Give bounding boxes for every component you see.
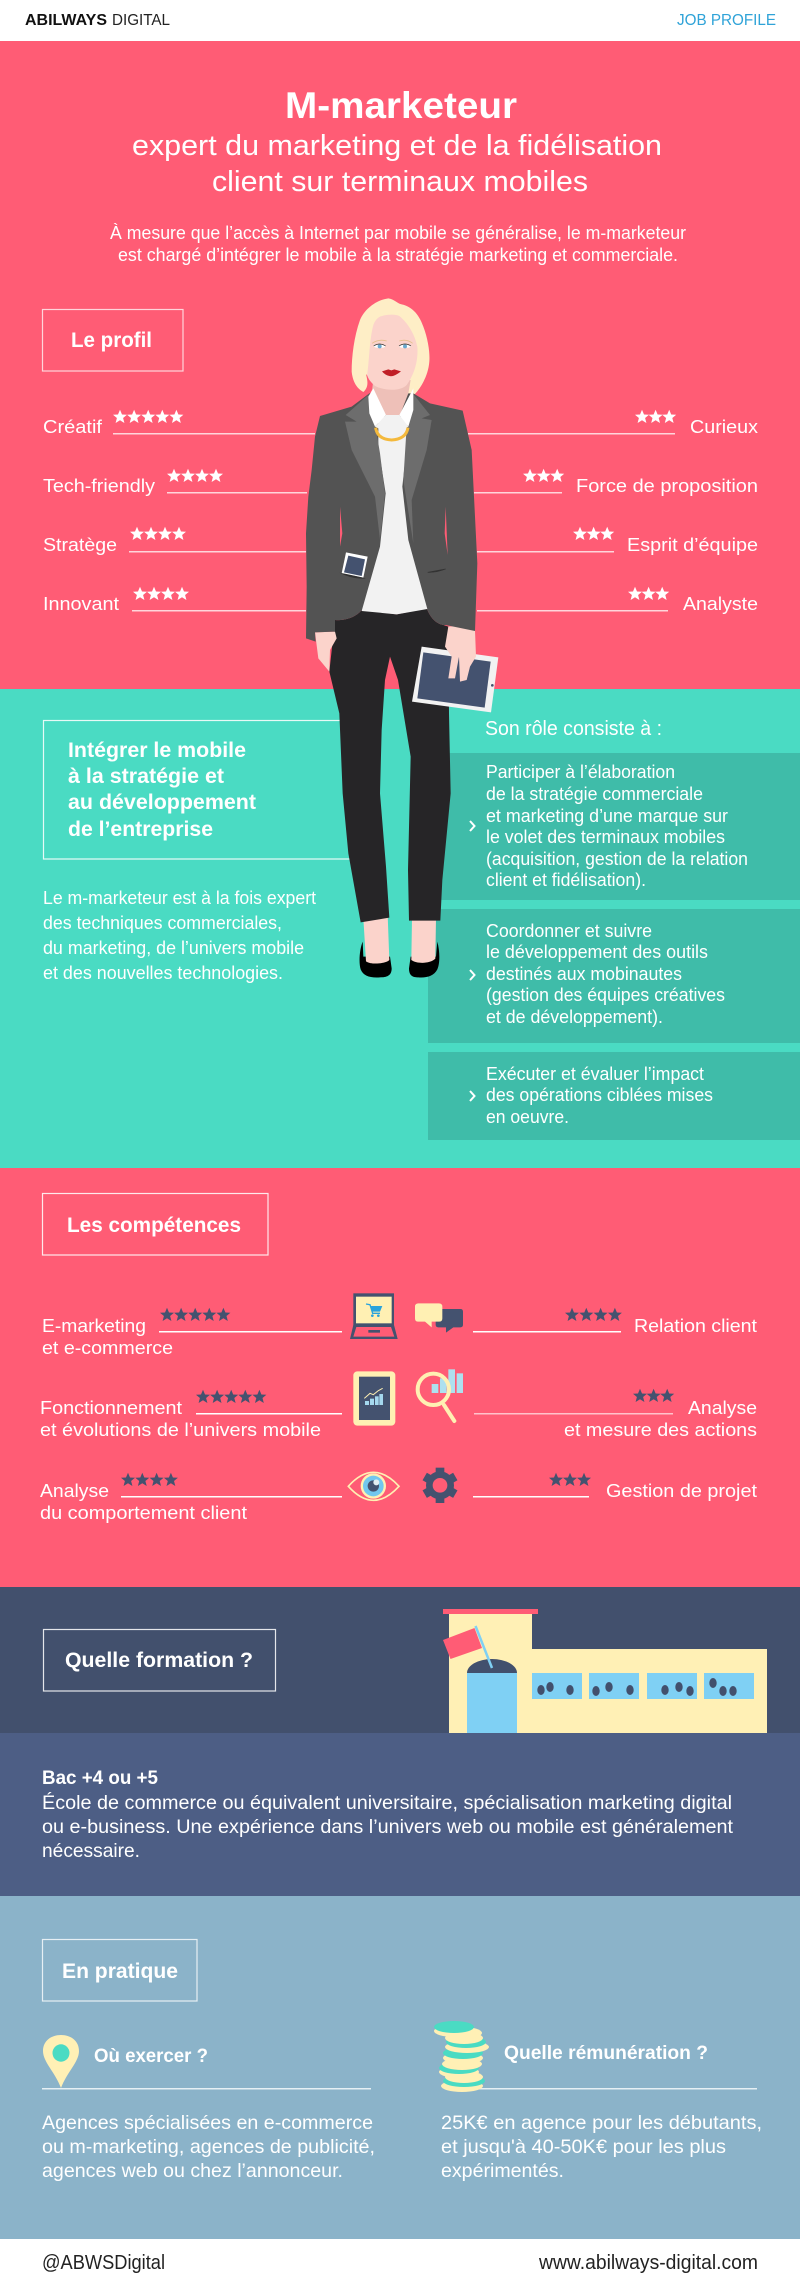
skill: Analyse et mesure: et mesure des actions [564, 1419, 757, 1440]
column: où exercer: ou m-marketing, agences de publicité, [42, 2136, 375, 2158]
trait: Esprit d'équipe [477, 527, 758, 555]
text: description [43, 887, 316, 983]
eyes [372, 340, 413, 348]
skill: Analyse du comportement: du comportement client [40, 1502, 247, 1523]
heading: le profil: Le profil [71, 328, 152, 352]
heading: quelle formation [44, 1630, 276, 1691]
text: description: des techniques commerciales, [43, 912, 282, 933]
skill: Analyse et mesure: Analyse [688, 1397, 757, 1418]
people in windows [537, 1678, 737, 1696]
role text 2: destinés aux mobinautes [486, 963, 682, 984]
trait: Créatif [43, 410, 315, 437]
skill: Analyse du comportement [40, 1473, 342, 1523]
trait: Curieux [468, 410, 759, 437]
lower legs [363, 915, 436, 964]
logo: DIGITAL [112, 12, 170, 29]
trait: Créatif: Créatif [43, 416, 103, 437]
heading: en pratique: En pratique [62, 1959, 178, 1983]
icon: speech bubbles [415, 1303, 463, 1333]
logo [25, 12, 170, 29]
neck [372, 380, 411, 417]
chevron [470, 970, 474, 980]
skill: Analyse du comportement: Analyse [40, 1480, 109, 1501]
door [467, 1673, 517, 1733]
hair back [352, 298, 429, 394]
trait: Innovant: Innovant [43, 593, 119, 614]
role text 3: Exécuter et évaluer l’impact [486, 1063, 704, 1084]
role text 3: en oeuvre. [486, 1106, 569, 1127]
heading: intégrer le mobile: de l’entreprise [68, 817, 213, 841]
intro text: est chargé d’intégrer le mobile à la stratégie marketing et commerciale. [118, 244, 678, 265]
role card 1 [428, 753, 800, 900]
panel: formation header [0, 1587, 800, 1733]
trait: Analyste [477, 587, 758, 614]
skill: E-marketing [42, 1308, 342, 1358]
text: description: et des nouvelles technologies. [43, 962, 283, 983]
heading: son rôle: Son rôle consiste à : [485, 717, 662, 740]
role text 2 [470, 920, 725, 1027]
role text 1: client et fidélisation). [486, 869, 646, 890]
left lapel [345, 394, 385, 540]
profile traits: right [468, 410, 759, 614]
role text 3: des opérations ciblées mises [486, 1084, 713, 1105]
role text 2: Coordonner et suivre [486, 920, 652, 941]
icon: tablet chart [353, 1371, 395, 1426]
heading: les compétences [42, 1194, 268, 1255]
text: description: Le m-marketeur est à la fois expert [43, 887, 316, 908]
column: où exercer: Agences spécialisées en e-commerce [42, 2112, 373, 2134]
role text 1: Participer à l’élaboration [486, 761, 675, 782]
heading: intégrer le mobile: à la stratégie et [68, 764, 224, 788]
column: où exercer: agences web ou chez l’annonceur. [42, 2160, 343, 2182]
panel: formation text: Bac +4 ou +5 [42, 1767, 158, 1789]
heading: intégrer le mobile: au développement [68, 790, 256, 814]
panel: formation text [0, 1733, 800, 1896]
profile traits: left [43, 410, 315, 614]
column: quelle rémunération: et jusqu'à 40-50K€ pour les plus [441, 2136, 726, 2158]
right hand [445, 625, 476, 682]
trait: Tech-friendly: Tech-friendly [43, 475, 156, 496]
icon: laptop with cart [350, 1293, 398, 1339]
collar [368, 388, 413, 427]
header bar [0, 0, 800, 41]
heading: quelle formation: Quelle formation ? [65, 1648, 253, 1672]
pocket flap [428, 569, 446, 572]
panel: formation text: ou e-business. Une expérience dans l’univers web ou mobile est généralement [42, 1816, 734, 1838]
trait: Force de proposition: Force de proposition [576, 475, 758, 496]
skill: Relation client: Relation client [634, 1315, 757, 1336]
title: client sur terminaux mobiles [212, 166, 588, 198]
role card 3 [428, 1052, 800, 1140]
title [132, 85, 662, 198]
role text 1 [470, 761, 748, 890]
right lapel [403, 394, 432, 543]
column: quelle rémunération: 25K€ en agence pour les débutants, [441, 2112, 762, 2134]
heading: les compétences: Les compétences [67, 1213, 241, 1237]
panel: compétences section [0, 1168, 800, 1587]
windows [532, 1673, 754, 1699]
trait: Force de proposition [474, 469, 758, 496]
job profile label: JOB PROFILE [677, 12, 776, 29]
title: M-marketeur [285, 85, 517, 126]
icon: coin stack [434, 2021, 489, 2092]
panel: role section [0, 689, 800, 1168]
necklace [376, 428, 408, 440]
trait: Analyste: Analyste [683, 593, 758, 614]
skill: Fonctionnement: Fonctionnement [40, 1397, 182, 1418]
tablet [412, 647, 498, 712]
lips [382, 369, 401, 376]
column: où exercer [42, 2035, 375, 2182]
icon: gear [423, 1468, 457, 1503]
column: où exercer: Où exercer ? [94, 2045, 208, 2067]
panel: formation text: nécessaire. [42, 1840, 140, 1862]
icon: map pin [43, 2035, 79, 2088]
illustration: businesswoman [306, 298, 498, 977]
heading: intégrer le mobile [44, 720, 364, 859]
role text 1: et marketing d’une marque sur [486, 805, 728, 826]
face [367, 315, 418, 390]
jacket [306, 393, 477, 642]
column: quelle rémunération: expérimentés. [441, 2160, 564, 2182]
skill: Fonctionnement [40, 1390, 342, 1440]
role text 2: et de développement). [486, 1006, 663, 1027]
column: quelle rémunération [434, 2021, 762, 2182]
illustration: school building [443, 1609, 767, 1733]
skill: Analyse et mesure [474, 1389, 757, 1440]
panel: formation text: École de commerce ou équivalent universitaire, spécialisation marketing digital [42, 1791, 732, 1814]
skill: Fonctionnement: et évolutions de l’univers mobile [40, 1419, 321, 1440]
left hand [315, 632, 337, 672]
skill: E-marketing: E-marketing [42, 1315, 146, 1336]
pocket phone [339, 552, 368, 579]
trousers [329, 608, 451, 922]
door arch [467, 1659, 517, 1673]
blouse neckline [375, 415, 408, 432]
footer [0, 2239, 800, 2286]
role text 2: le développement des outils [486, 941, 708, 962]
footer: @ABWSDigital [42, 2252, 165, 2274]
pink gap by hair [363, 374, 375, 395]
skill: Relation client [473, 1308, 757, 1336]
skill: E-marketing: et e-commerce [42, 1337, 173, 1358]
trait: Innovant [43, 587, 306, 614]
chevron [470, 821, 474, 831]
logo: ABILWAYS [25, 12, 107, 29]
icon: magnifier with bars [418, 1369, 463, 1421]
heading: en pratique [42, 1940, 197, 2001]
role text 3 [470, 1063, 713, 1127]
trait: Stratège: Stratège [43, 534, 117, 555]
column: quelle rémunération: Quelle rémunération ? [504, 2042, 708, 2064]
shoes [360, 942, 439, 977]
flag [443, 1626, 492, 1668]
heading: le profil [42, 310, 183, 371]
intro text [110, 222, 686, 265]
panel: en pratique [0, 1896, 800, 2239]
chevron [470, 1091, 474, 1101]
icon: eye [348, 1472, 399, 1500]
heading: intégrer le mobile: Intégrer le mobile [68, 738, 246, 762]
text: description: du marketing, de l’univers mobile [43, 937, 304, 958]
trait: Tech-friendly [43, 469, 307, 496]
role text 1: le volet des terminaux mobiles [486, 826, 725, 847]
trait: Stratège [43, 527, 306, 555]
skill: Gestion de projet: Gestion de projet [606, 1480, 757, 1501]
sleeve gaps [340, 507, 448, 555]
title: expert du marketing et de la fidélisation [132, 130, 662, 162]
skill icons [348, 1293, 463, 1503]
trait: Curieux: Curieux [690, 416, 759, 437]
role text 1: (acquisition, gestion de la relation [486, 848, 748, 869]
intro text: À mesure que l’accès à Internet par mobile se généralise, le m-marketeur [110, 222, 686, 243]
role text 2: (gestion des équipes créatives [486, 984, 725, 1005]
panel: profile background [0, 41, 800, 689]
role text 1: de la stratégie commerciale [486, 783, 703, 804]
skill: Gestion de projet [473, 1473, 757, 1501]
role card 2 [428, 909, 800, 1043]
trait: Esprit d'équipe: Esprit d’équipe [627, 534, 758, 555]
blouse [362, 417, 427, 614]
footer: www.abilways-digital.com [538, 2252, 758, 2274]
